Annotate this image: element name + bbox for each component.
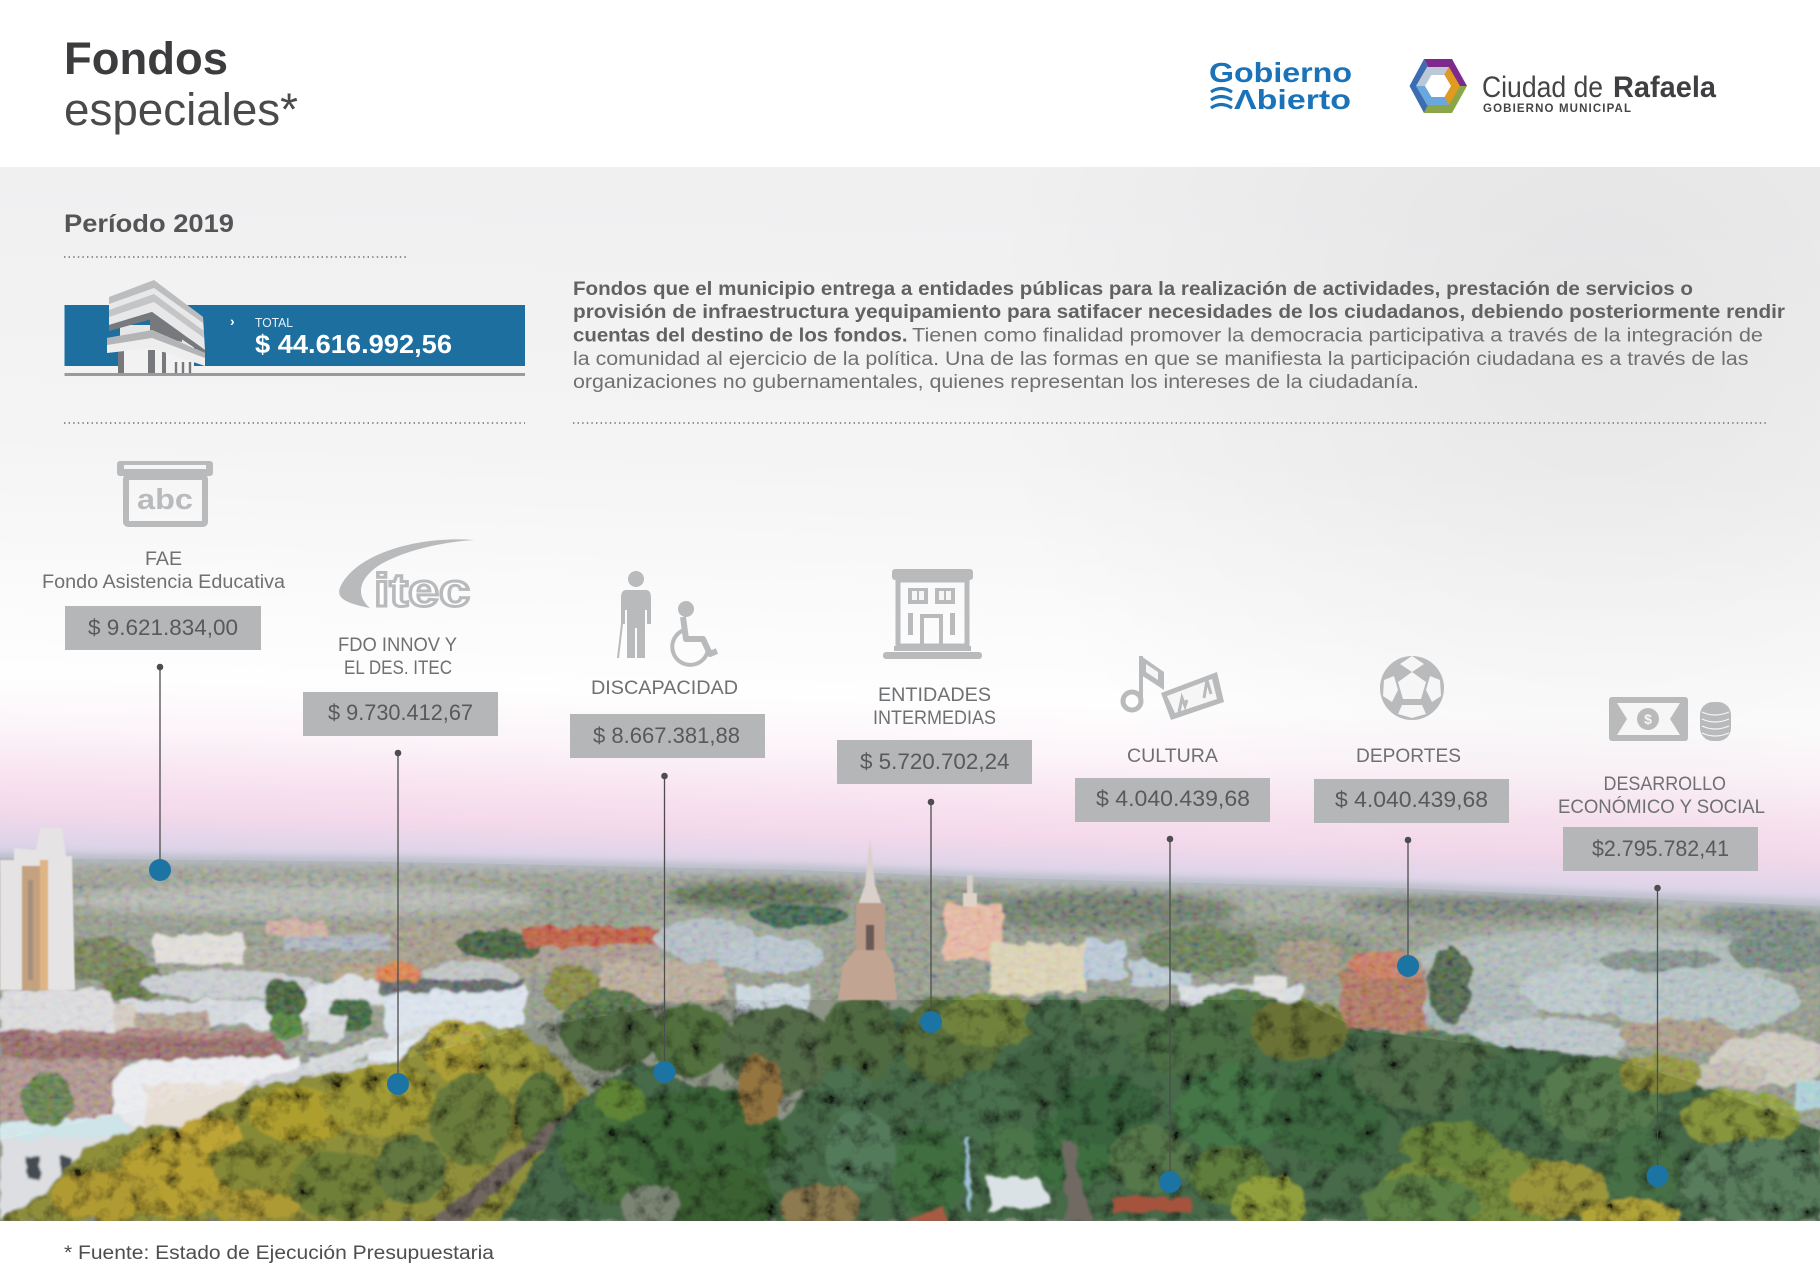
city panorama photo [0, 828, 1820, 1236]
connector pin [654, 773, 676, 1083]
fund: DISCAPACIDAD [570, 571, 765, 1083]
heading: Período 2019: Período 2019 [64, 210, 234, 238]
left tower [0, 828, 75, 990]
connector pin [387, 750, 409, 1095]
church [838, 838, 977, 1000]
hexagon mark [1410, 59, 1467, 113]
icon: soccer ball [1380, 656, 1444, 720]
title: Fondos [64, 33, 228, 84]
fund: FDO INNOV Y EL DES. ITEC: $ 9.730.412,67 [328, 700, 473, 725]
white header band [0, 0, 1820, 167]
connector pin [1159, 836, 1181, 1193]
logo: Ciudad de Rafaela [1410, 59, 1716, 115]
bottom yellow trees right [1234, 1121, 1680, 1235]
fund: DESARROLLO ECONÓMICO Y SOCIAL [1558, 697, 1765, 1187]
fund: FDO INNOV Y EL DES. ITEC: FDO INNOV Y [338, 635, 457, 656]
icon: itec logo: itec [374, 564, 470, 616]
yellow trees left [0, 1020, 590, 1221]
logo: Gobierno Abierto: Λbierto [1234, 84, 1351, 115]
icon: banknote and coins [1609, 697, 1731, 741]
description paragraph: provisión de infraestructura yequipamiento para satifacer necesidades de los ciudadanos, debiendo posteriormente rendir [573, 302, 1786, 323]
white block [0, 1020, 445, 1221]
fund: DISCAPACIDAD: DISCAPACIDAD [591, 678, 738, 699]
street [431, 1110, 570, 1221]
icon: abc board [117, 461, 213, 524]
fountain and plaza [905, 1140, 1190, 1221]
fund: FAE [42, 461, 285, 881]
fund: DEPORTES: DEPORTES [1356, 746, 1461, 767]
speckle for the rooftops [0, 858, 1820, 1148]
horizon haze [0, 858, 1820, 906]
icon: abc board: abc [137, 484, 193, 516]
description paragraph: la comunidad al ejercicio de la política. Una de las formas en que se manifiesta la participación ciudadana es a través de las [573, 349, 1748, 370]
connector pin [1397, 837, 1419, 977]
fund: CULTURA: CULTURA [1127, 746, 1218, 767]
fund: CULTURA: $ 4.040.439,68 [1096, 786, 1250, 811]
description paragraph: Tienen como finalidad promover la democracia participativa a través de la integración de [912, 326, 1763, 346]
connector pin [149, 664, 171, 881]
fund: DESARROLLO ECONÓMICO Y SOCIAL: ECONÓMICO Y SOCIAL [1558, 796, 1765, 818]
fund: FDO INNOV Y EL DES. ITEC [303, 539, 498, 1095]
logo: Ciudad de Rafaela: Rafaela [1613, 71, 1716, 104]
icon: itec logo [339, 539, 474, 616]
fund: DESARROLLO ECONÓMICO Y SOCIAL: $2.795.782,41 [1592, 836, 1729, 861]
title [64, 33, 298, 135]
fund: FAE: $ 9.621.834,00 [88, 615, 238, 640]
connector pin [920, 799, 942, 1033]
total banner: › [230, 313, 235, 329]
centre buildings [945, 905, 1472, 1032]
icon: music note and ticket [1123, 656, 1224, 720]
title: especiales* [64, 84, 298, 135]
description paragraph: organizaciones no gubernamentales, quienes representan los intereses de la ciudadanía. [573, 372, 1419, 393]
far right neighbourhood [1420, 928, 1820, 1110]
icon: elderly person and wheelchair [618, 571, 717, 665]
fund: DEPORTES [1314, 656, 1509, 977]
total banner: TOTAL [255, 315, 293, 330]
leaf shadow for the trees [0, 996, 1820, 1221]
fund: FAE: FAE [145, 549, 182, 570]
left mid neighbourhood [55, 903, 850, 1070]
logo: Gobierno Abierto: Gobierno [1209, 57, 1352, 88]
fund: ENTIDADES INTERMEDIAS [837, 569, 1032, 1033]
fund: ENTIDADES INTERMEDIAS: $ 5.720.702,24 [860, 749, 1010, 774]
logo: Ciudad de Rafaela: Ciudad de [1482, 71, 1603, 104]
icon: building [107, 280, 205, 373]
central dark trees [500, 990, 1820, 1236]
logo: Ciudad de Rafaela: GOBIERNO MUNICIPAL [1483, 103, 1631, 115]
footnote: * Fuente: Estado de Ejecución Presupuestaria [64, 1243, 494, 1264]
fund: ENTIDADES INTERMEDIAS: ENTIDADES [878, 685, 991, 706]
fund: DESARROLLO ECONÓMICO Y SOCIAL: DESARROLLO [1604, 774, 1726, 795]
total banner: $ 44.616.992,56 [255, 329, 452, 359]
fund: DEPORTES: $ 4.040.439,68 [1335, 787, 1488, 812]
total banner [64, 280, 525, 376]
description paragraph: cuentas del destino de los fondos. [573, 326, 908, 346]
description paragraph: Fondos que el municipio entrega a entidades públicas para la realización de actividades, prestación de servicios o [573, 279, 1693, 300]
fund: FAE: Fondo Asistencia Educativa [42, 572, 285, 593]
connector pin [1646, 885, 1668, 1187]
fund: CULTURA [1075, 656, 1270, 1193]
fund: FDO INNOV Y EL DES. ITEC: EL DES. ITEC [344, 658, 452, 679]
description paragraph [573, 279, 1786, 393]
icon: banknote and coins: $ [1644, 711, 1652, 727]
fund: ENTIDADES INTERMEDIAS: INTERMEDIAS [873, 708, 996, 729]
white footer band [0, 1221, 1820, 1286]
left base buildings [0, 990, 292, 1125]
fund: DISCAPACIDAD: $ 8.667.381,88 [593, 723, 740, 748]
icon: office building [883, 569, 982, 659]
logo: Gobierno Abierto [1209, 57, 1352, 115]
